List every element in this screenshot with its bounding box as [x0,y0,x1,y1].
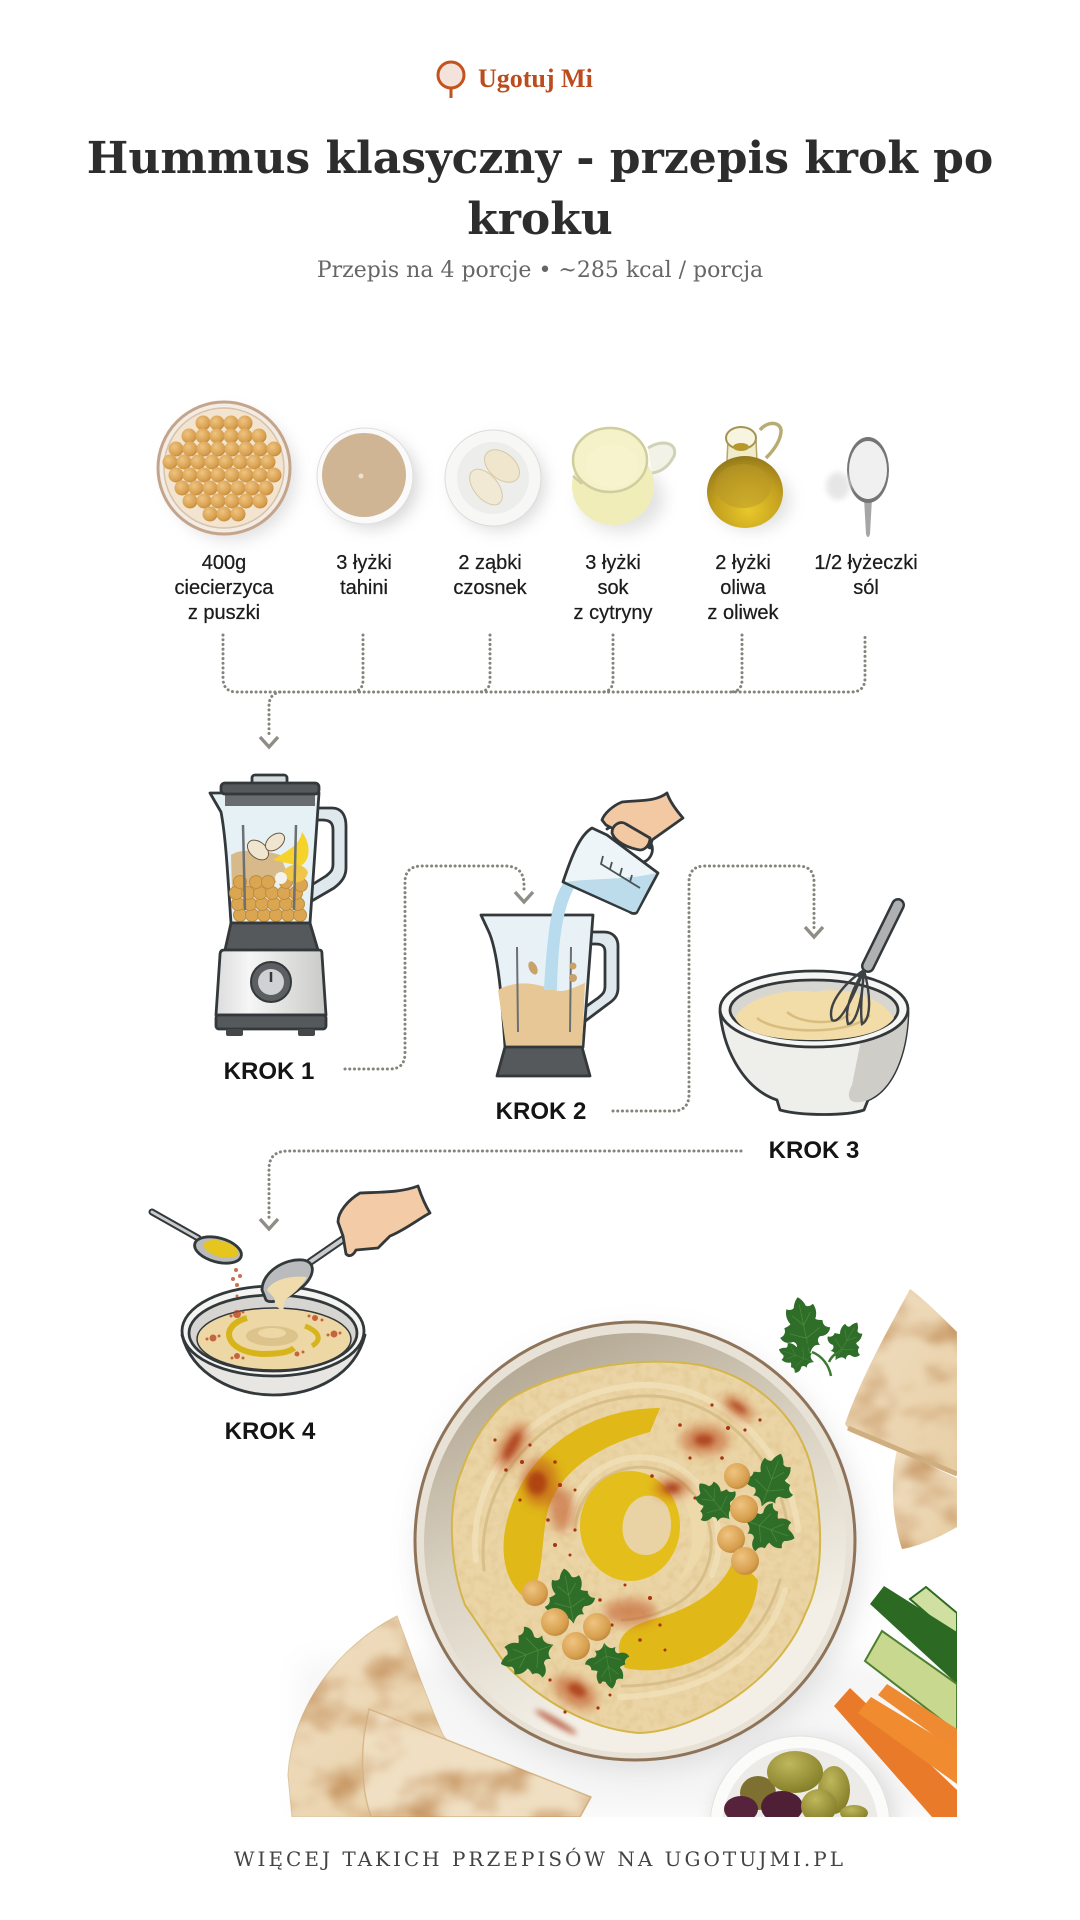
icon: bowl [182,1335,365,1395]
icon: jar [481,915,593,1047]
ingredient: garlic [445,430,545,530]
step 4: garnish [152,1186,430,1445]
panel: ingredients [158,402,918,747]
oil swirl [504,1408,758,1670]
title: Hummus klasyczny - przepis krok po kroku [87,133,993,245]
ingredient: tahini [317,428,418,528]
icon: whisk [831,905,898,1024]
icon: motor base [497,1047,590,1076]
ingredient labels: z cytryny [574,602,652,624]
arrow: step 2 to step 3 [613,866,823,1111]
label: step 4: KROK 4 [225,1418,316,1445]
jar rods and splashes [517,947,577,1032]
footer: WIĘCEJ TAKICH PRZEPISÓW NA UGOTUJMI.PL [234,1847,846,1871]
subtitle: Przepis na 4 porcje • ~285 kcal / porcja [317,258,763,283]
hummus ridges [475,1385,798,1697]
icon: motor base [216,923,326,1036]
icon: lid [221,775,319,806]
jar contents [230,825,309,922]
hummus bowl [415,1322,862,1771]
garnish left [492,1564,634,1693]
ingredient labels: tahini [340,577,388,599]
ingredient labels: z puszki [188,602,260,624]
ingredient: chickpeas [158,402,296,540]
ingredient labels: 2 ząbki [458,552,522,574]
ingredient labels: oliwa [720,577,767,599]
arrow: step 1 to step 2 [345,866,533,1069]
ingredient labels: 3 łyżki [336,552,392,574]
icon: oil spoon [152,1212,244,1268]
icon: hand [602,793,683,850]
oil centre pool [580,1471,680,1581]
icon: serving spoon [262,1222,368,1312]
hummus contents [498,983,585,1046]
carrot sticks [834,1684,957,1817]
ingredient labels: 1/2 łyżeczki [814,552,918,574]
oil and paprika swirl [206,1268,342,1360]
batter [735,990,894,1040]
icon: handle [310,808,346,902]
ingredient labels: sok [597,577,630,599]
hummus [197,1308,351,1370]
cucumber sticks [865,1586,957,1732]
label: step 1: KROK 1 [224,1058,314,1085]
step 1: blender [210,775,346,1085]
logo [436,60,593,98]
ingredient labels: czosnek [453,577,528,599]
ingredient labels: ciecierzyca [175,577,274,599]
label: step 3: KROK 3 [769,1137,859,1164]
photo background [320,1680,938,1798]
ingredient: lemon juice [572,428,675,532]
ingredient labels: 400g [202,552,246,574]
label: step 2: KROK 2 [496,1098,586,1125]
garnish right [695,1454,794,1575]
paprika [489,1390,762,1737]
water stream [544,882,574,990]
step 3: bowl with whisk [720,905,908,1164]
ingredient labels: sól [853,577,879,599]
icon: bowl [720,1012,908,1114]
arrow: step 3 to step 4 [260,1151,741,1229]
hero photo: finished hummus [288,1289,957,1817]
icon: jar [210,793,319,923]
step 2: blender pouring [481,793,683,1125]
icon: measuring cup [563,825,658,914]
icon: hand [338,1186,430,1256]
pita bottom left [285,1610,595,1820]
ingredient labels [175,552,918,624]
arrow: ingredients to step 1 [223,635,865,747]
ingredient: olive oil [707,423,790,530]
parsley sprig [779,1297,862,1376]
ingredient labels: 3 łyżki [585,552,641,574]
pita top right [845,1289,957,1549]
ingredient labels: 2 łyżki [715,552,771,574]
logo: Ugotuj Mi [478,64,593,93]
ingredient labels: z oliwek [707,602,780,624]
olive bowl [709,1733,901,1817]
ingredient: salt [826,437,889,537]
hummus centre swirl [622,1496,671,1555]
hummus base [452,1362,820,1733]
icon: handle [584,932,618,1022]
